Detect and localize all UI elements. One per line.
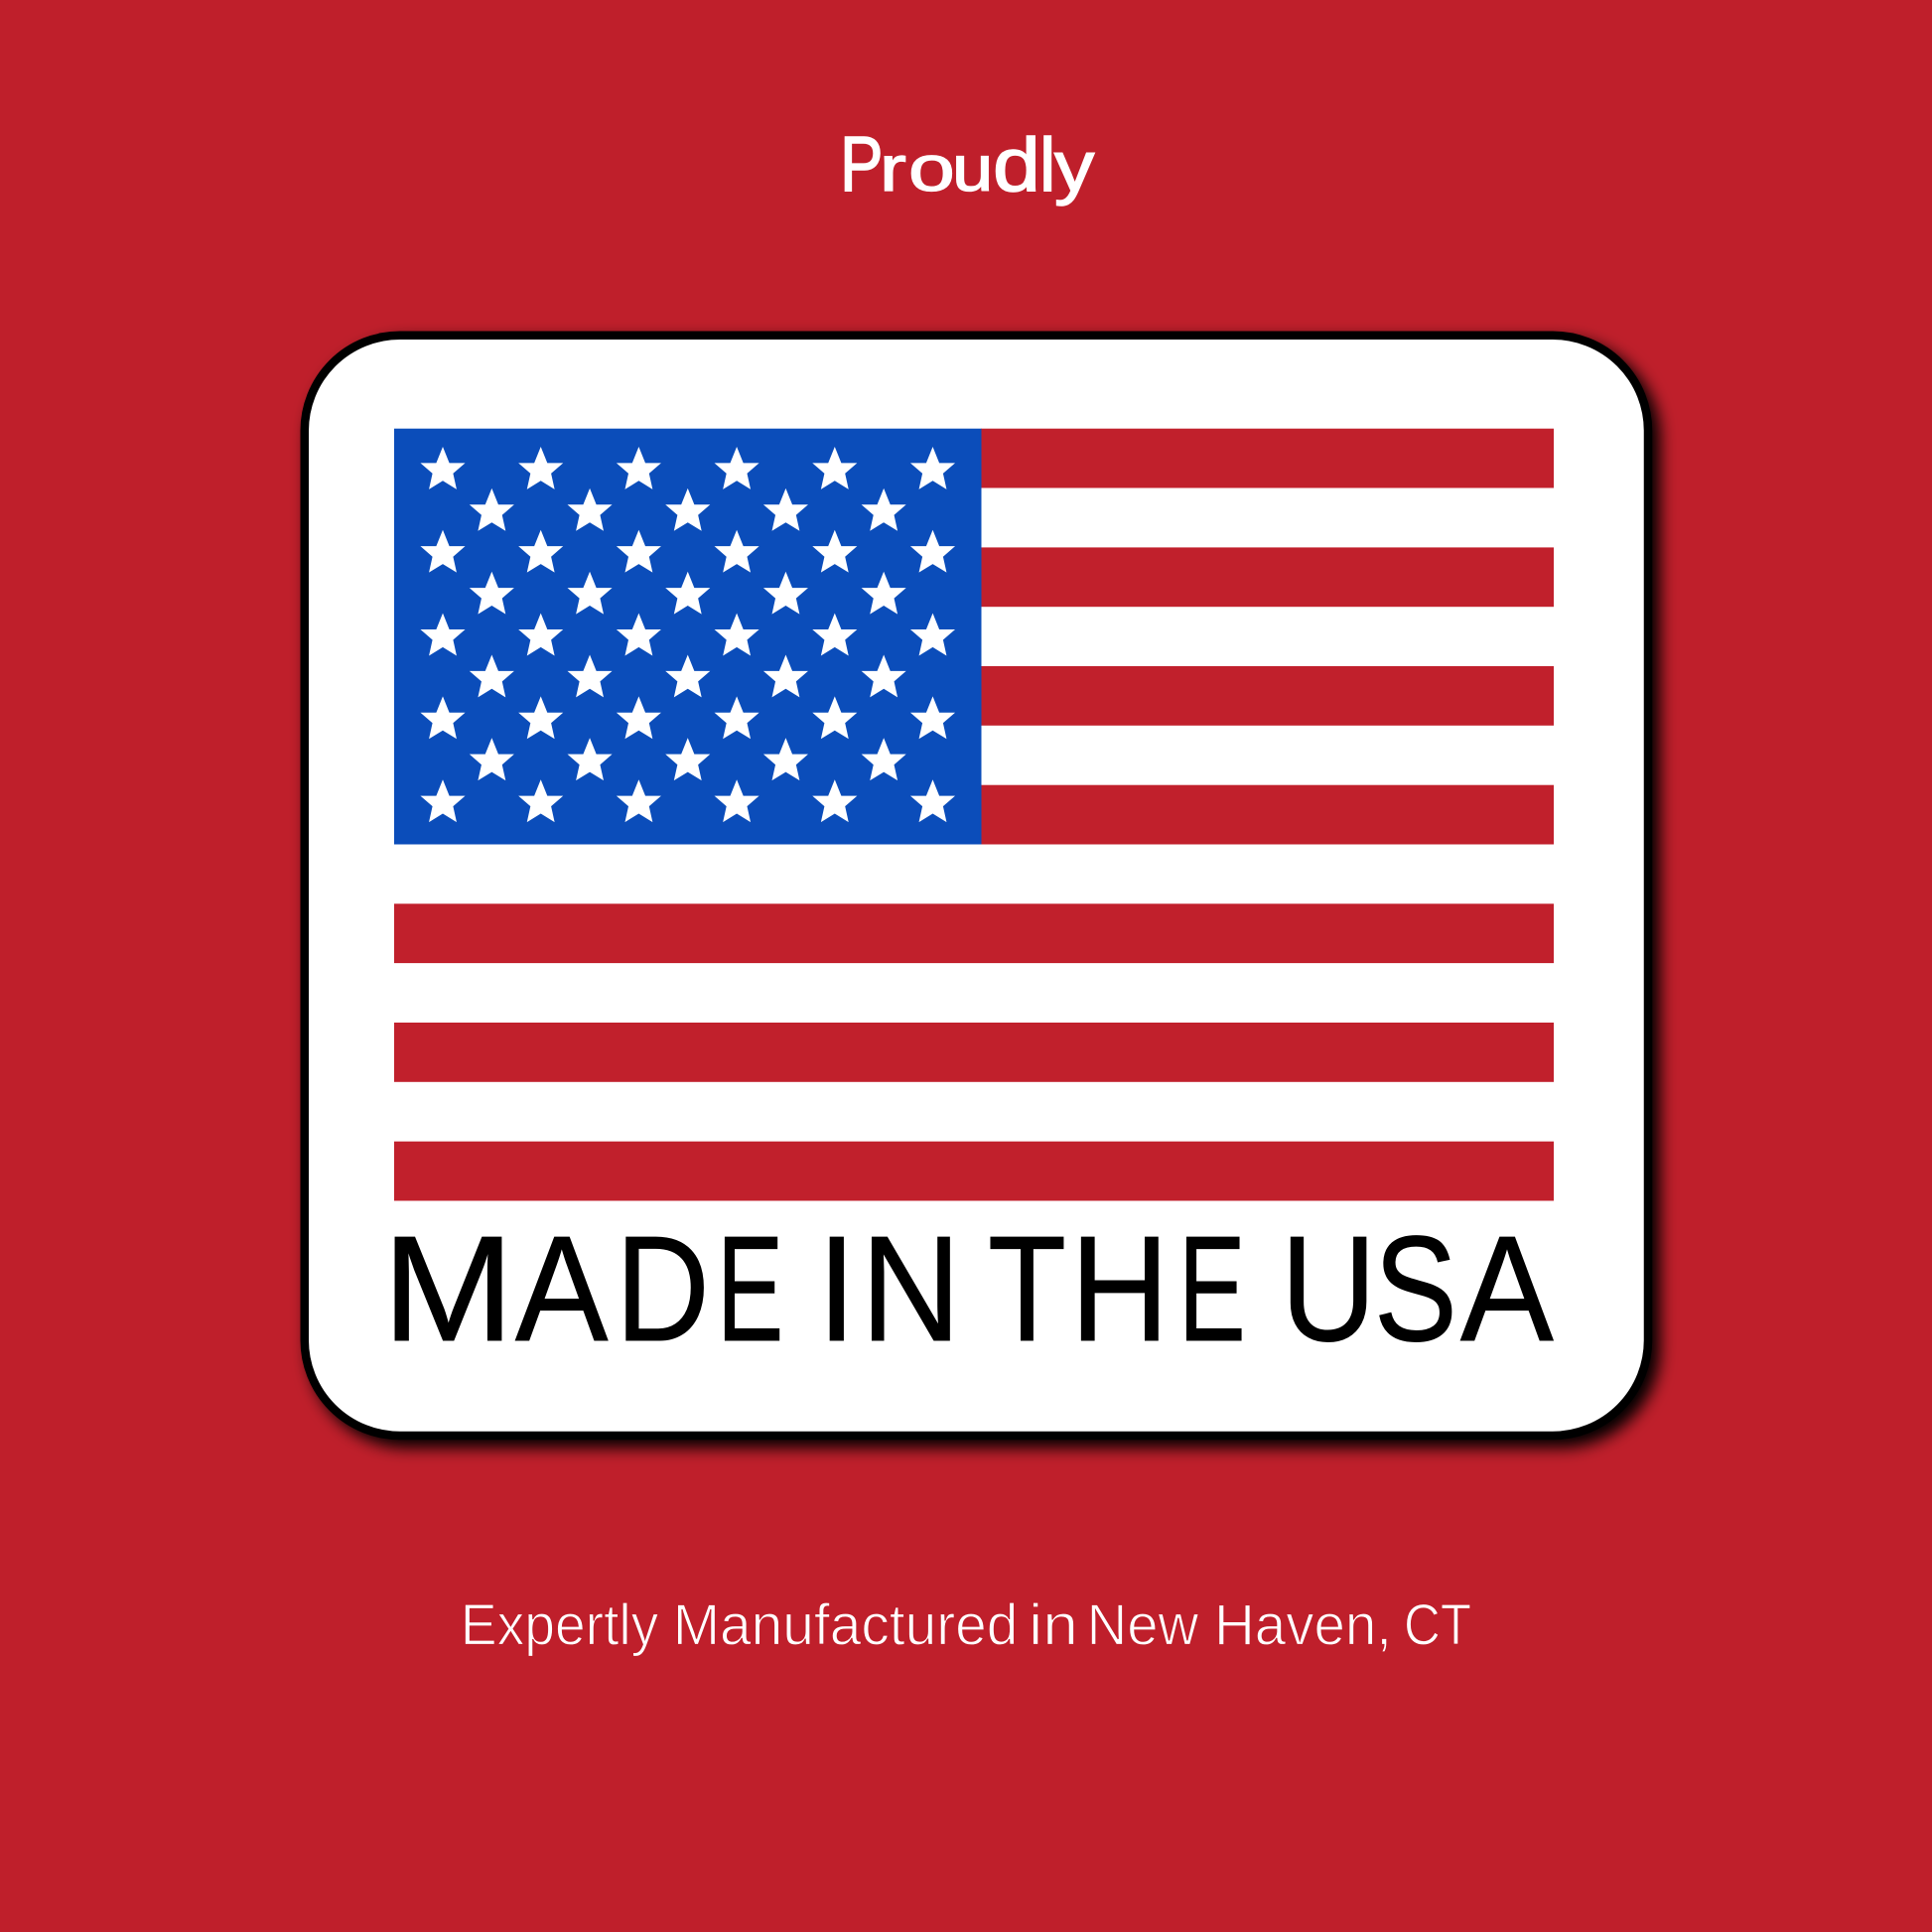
heading: Proudly: y (1054, 126, 1094, 206)
label text: MADE IN THE USA: S (1374, 1204, 1457, 1372)
heading: Proudly: o (908, 132, 955, 205)
label text: MADE IN THE USA: U (1281, 1204, 1376, 1372)
heading: Proudly: r (880, 132, 906, 205)
label text: MADE IN THE USA (0, 1189, 1932, 1388)
panel: white label card (0, 336, 1932, 1436)
tagline: manufacturing location: CT (1404, 1593, 1471, 1658)
tagline: manufacturing location: Expertly (461, 1593, 658, 1658)
flag canton with 50 stars (394, 429, 981, 844)
label text: MADE IN THE USA: H (1070, 1204, 1170, 1372)
label text: MADE IN THE USA: A (515, 1204, 609, 1372)
heading: Proudly: d (993, 122, 1040, 207)
label text: MADE IN THE USA: T (988, 1204, 1066, 1372)
card background with black border and shadow (305, 336, 1648, 1436)
flag stripes (394, 429, 1554, 1201)
tagline: manufacturing location: in (1029, 1593, 1078, 1658)
label text: MADE IN THE USA: D (616, 1204, 710, 1372)
tagline: manufacturing location: Manufactured (673, 1593, 1018, 1658)
label text: MADE IN THE USA: E (717, 1204, 783, 1372)
tagline: manufacturing location (461, 1593, 1471, 1658)
heading: Proudly (0, 114, 1932, 223)
tagline: manufacturing location: Haven, (1214, 1593, 1392, 1658)
label text: MADE IN THE USA: N (861, 1204, 961, 1372)
label text: MADE IN THE USA: I (817, 1204, 857, 1372)
label text: MADE IN THE USA: A (1460, 1204, 1554, 1372)
tagline: manufacturing location: New (1087, 1593, 1199, 1658)
heading: Proudly: P (840, 119, 883, 207)
icon: American flag (394, 429, 1554, 1201)
label text: MADE IN THE USA: E (1178, 1204, 1246, 1372)
label text: MADE IN THE USA: M (382, 1204, 514, 1372)
heading: Proudly: l (1039, 122, 1055, 207)
heading: Proudly: u (952, 132, 993, 205)
